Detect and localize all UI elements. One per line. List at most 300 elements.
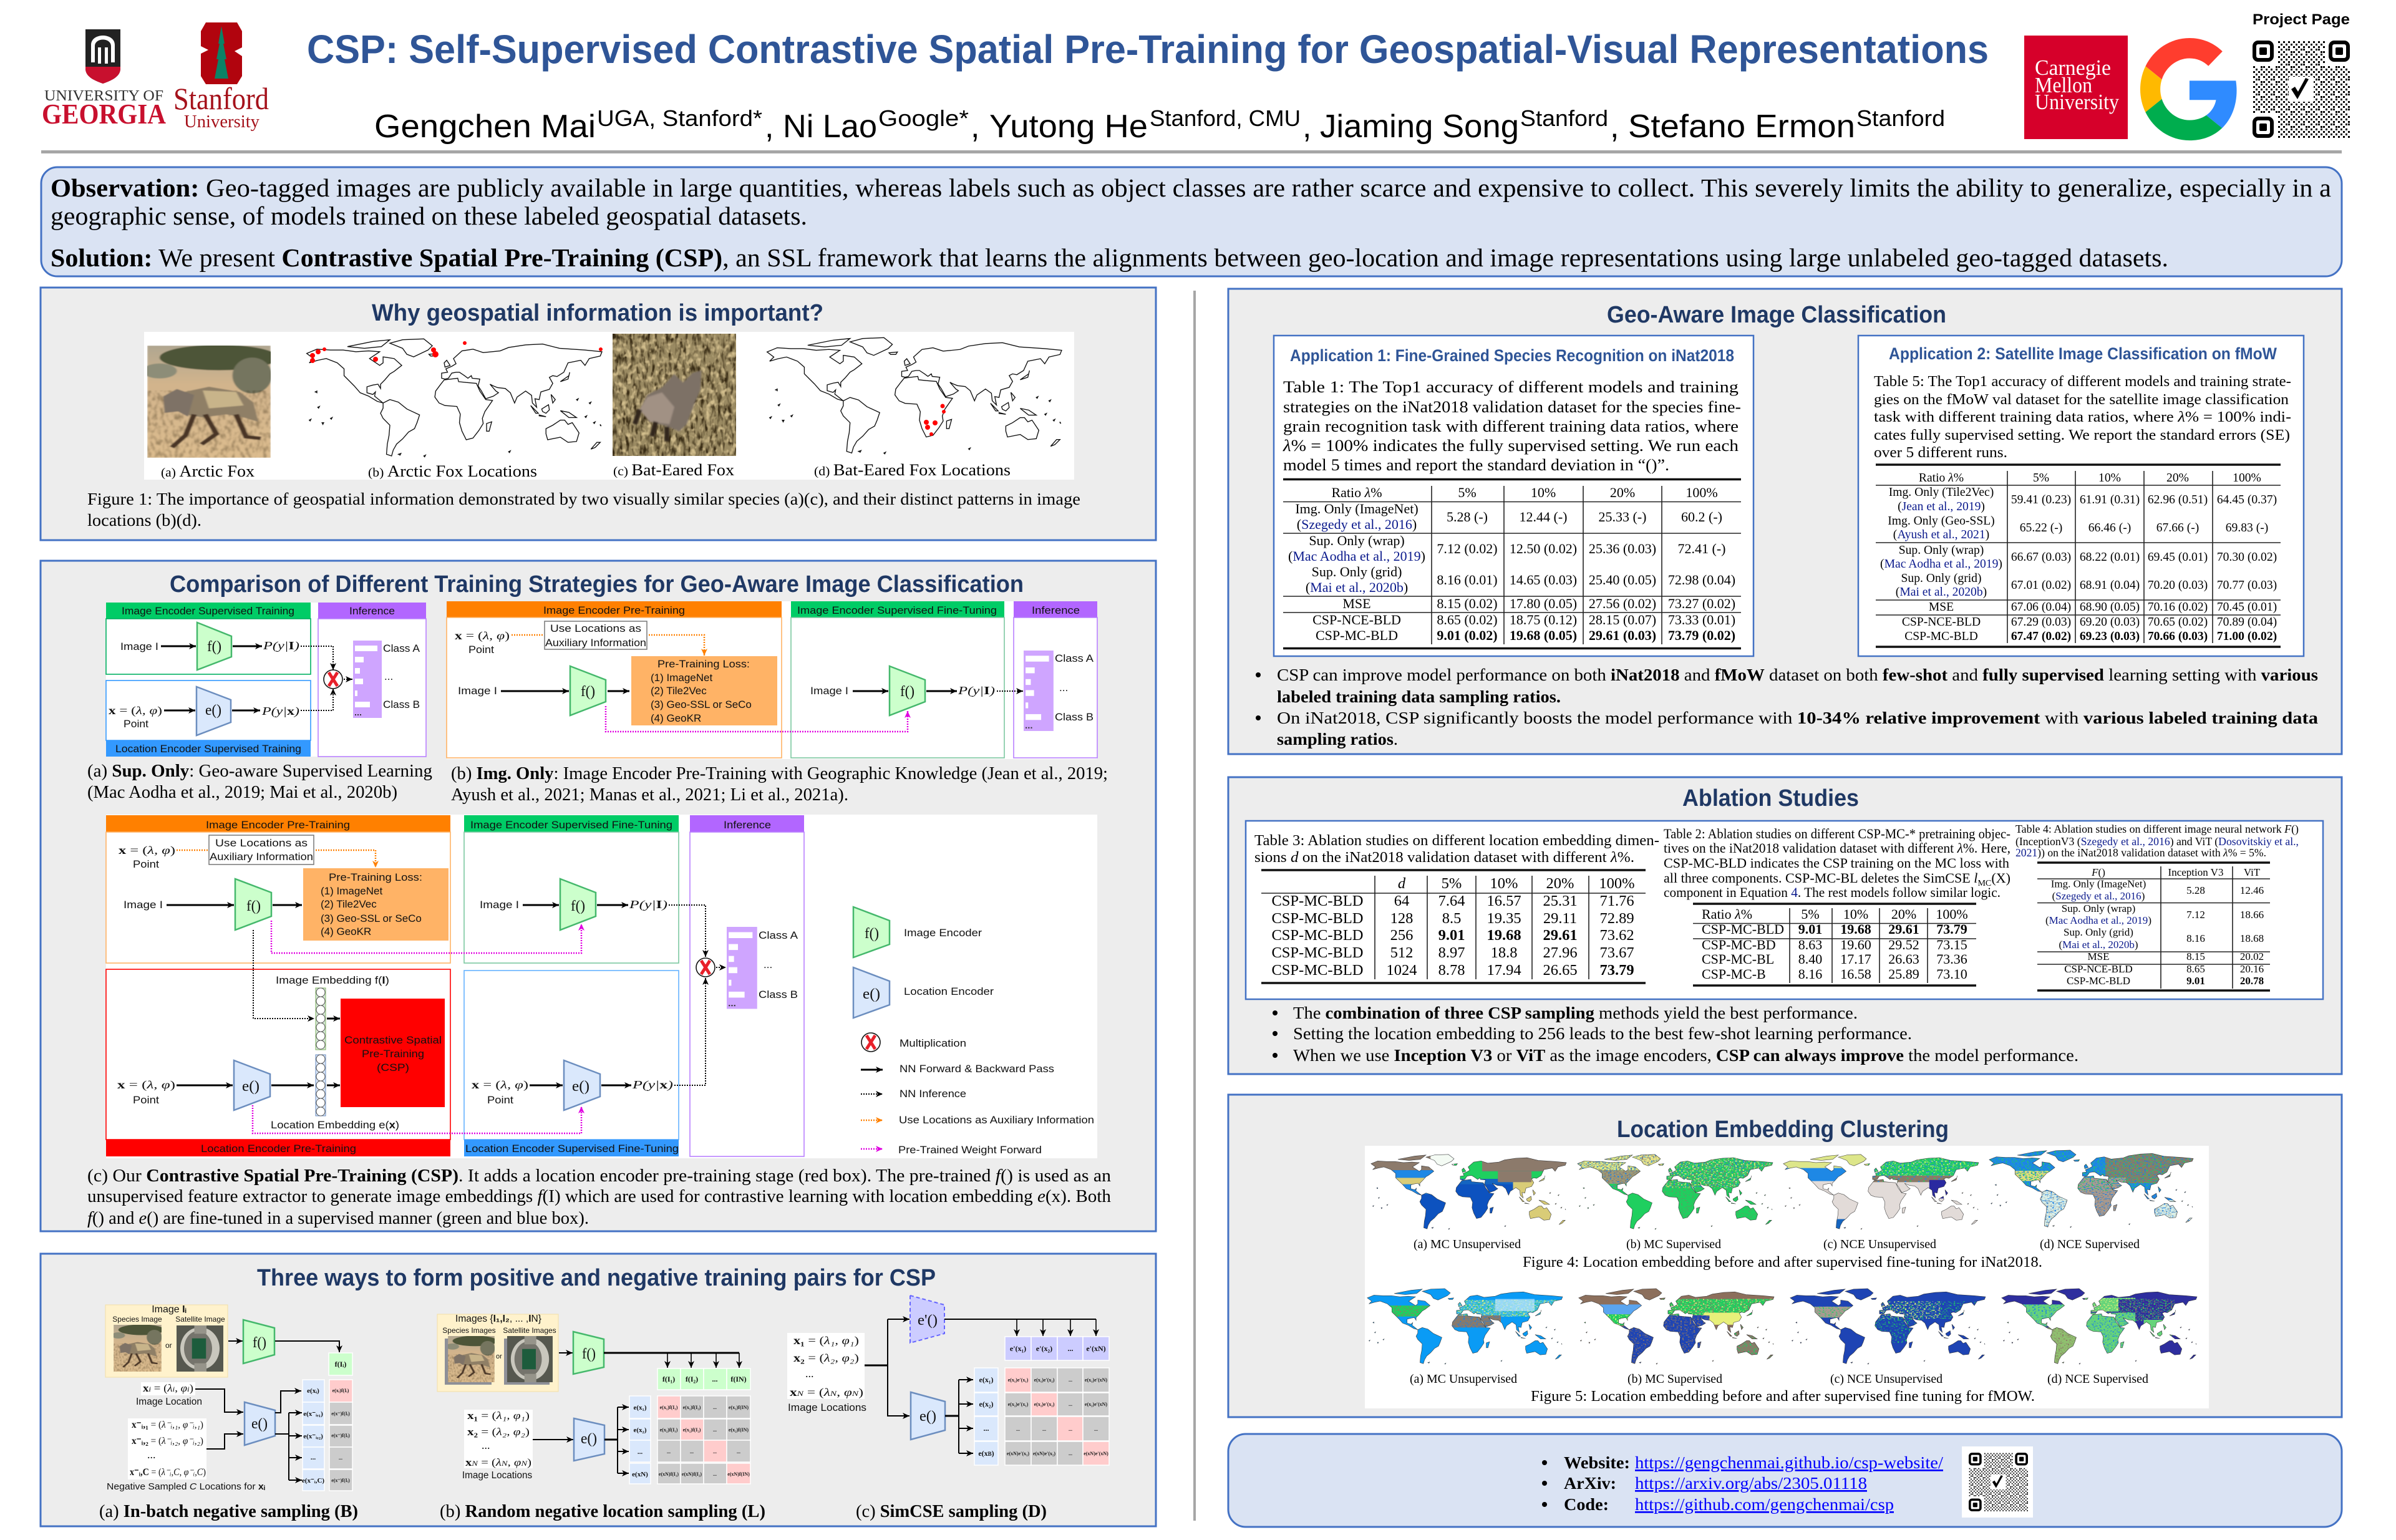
table 2: MC: [1977, 879, 1991, 888]
diagram: (c) contrastive spatial pre-training: Point: [133, 1094, 159, 1106]
caption: (c): unsupervised feature extractor to generate image embeddings f(I) which are used for contrastive learning with location embedding e(x). Both: [87, 1187, 1111, 1206]
logo: Carnegie Mellon University: Carnegie: [2035, 56, 2111, 80]
table 5: 68.22 (0.01): [2080, 551, 2140, 564]
table 3: 17.94: [1487, 962, 1521, 979]
diagram: (b) image only: f(): [900, 684, 914, 700]
panel: why geospatial information is important: [41, 288, 1156, 540]
diagram: (c) contrastive spatial pre-training: Point: [133, 858, 159, 870]
table 4: (): [2098, 866, 2105, 878]
table 1: 18.75 (0.12): [1510, 612, 1577, 627]
ablation bullets: The combination of three CSP sampling methods yield the best performance.: [1293, 1004, 1858, 1022]
table 1: 5.28 (-): [1447, 509, 1488, 525]
icon: project page QR code: [2253, 41, 2350, 138]
table 2: [1664, 826, 2010, 986]
table 3: CSP-MC-BLD: [1271, 927, 1364, 944]
diagram: random negative location sampling: f(I₂): [686, 1375, 698, 1383]
diagram: (a) supervised only: f(): [207, 639, 221, 655]
table 4: Img. Only (ImageNet): [2051, 878, 2146, 889]
map: arctic fox locations: [307, 339, 603, 457]
table 4: 5.28: [2186, 884, 2205, 896]
key findings bullets: labeled training data sampling ratios.: [1277, 687, 1561, 706]
table 3: 16.57: [1487, 893, 1521, 909]
table 4: 7.12: [2186, 909, 2205, 921]
table 1: Img. Only (ImageNet): [1295, 501, 1419, 516]
table 1: (Mac Aodha et al., 2019): [1288, 548, 1425, 564]
diagram: random negative location sampling: e(x₂)f(I₂): [683, 1427, 701, 1433]
table 2: 19.60: [1840, 937, 1871, 952]
diagram: SimCSE sampling: e'(x₁): [1010, 1344, 1026, 1353]
table 3: 26.65: [1543, 962, 1578, 979]
table 2: 100%: [1936, 906, 1968, 922]
table 1: 5%: [1458, 485, 1477, 500]
fig 5 sub-captions: [1410, 1372, 2148, 1386]
key findings bullets: [1256, 666, 2319, 748]
table 4: 18.68: [2240, 932, 2264, 944]
table 4: 20.16: [2240, 963, 2264, 975]
table 1: 100%: [1685, 485, 1718, 500]
table 3: 29.11: [1543, 910, 1577, 927]
diagram: (b) image only: f(): [581, 684, 595, 700]
table 5: 70.65 (0.02): [2148, 616, 2208, 629]
diagram: (c) contrastive spatial pre-training: Pre-Training Loss:: [329, 871, 422, 883]
diagram: (a) supervised only: e(): [205, 702, 221, 719]
table 5: 71.00 (0.02): [2217, 630, 2277, 643]
diagram: in-batch negative sampling: ...: [311, 1454, 316, 1461]
fig 4 sub-captions: (c) NCE Unsupervised: [1823, 1237, 1936, 1251]
diagram: in-batch negative sampling: e(x⁻ᵢ,₁): [303, 1410, 323, 1418]
link list: Website:: [1564, 1453, 1630, 1472]
diagram: (b) image only: Auxiliary Information: [545, 637, 646, 649]
table 5: (Ayush et al., 2021): [1893, 528, 1989, 541]
table 1 caption: model 5 times and report the standard deviation in “()”.: [1283, 456, 1669, 474]
map: bat-eared fox locations: [767, 337, 1062, 454]
map: fig 4b MC supervised: [1576, 1154, 1773, 1230]
table 3: Table 3: Ablation studies on different location embedding dimen-: [1254, 832, 1659, 849]
authors: Yutong He: [989, 109, 1148, 145]
table 3: 8.97: [1438, 944, 1465, 961]
map: fig 4c NCE unsupervised: [1782, 1154, 1979, 1230]
table 5: Sup. Only (grid): [1901, 572, 1981, 585]
diagram: random negative location sampling: f(): [582, 1346, 596, 1362]
table 3: d: [1398, 875, 1406, 892]
diagram: SimCSE sampling: e'(xN): [1086, 1344, 1106, 1353]
authors: Stanford: [1520, 105, 1608, 131]
table 5: Ratio λ%: [1919, 472, 1964, 485]
diagram: in-batch negative sampling: Image Location: [136, 1397, 202, 1407]
diagram: random negative location sampling: e(xN)f(IN): [727, 1471, 750, 1477]
table 1: 73.33 (0.01): [1668, 612, 1735, 627]
legend: Multiplication: [900, 1037, 966, 1049]
diagram: (c) contrastive spatial pre-training: ...: [764, 959, 772, 971]
table 5: 67.01 (0.02): [2011, 579, 2071, 592]
legend: e(): [863, 986, 880, 1002]
caption: (a): (a) Sup. Only: Geo-aware Supervised Learning: [87, 762, 432, 781]
panel: ablation studies: [1228, 777, 2342, 1074]
diagram: SimCSE sampling: e(x₂)e'(x₁): [1008, 1402, 1029, 1407]
table 2: 16.58: [1840, 966, 1871, 982]
table 1: 73.79 (0.02): [1668, 627, 1735, 643]
table 1: 27.56 (0.02): [1589, 596, 1656, 611]
diagram: (c) contrastive spatial pre-training: e(): [572, 1078, 589, 1095]
diagram: (b) image only: P(y| I): [958, 684, 995, 697]
table 5: MSE: [1929, 601, 1954, 614]
table 5: 10%: [2098, 472, 2121, 485]
table 5: 67.66 (-): [2156, 521, 2199, 535]
table 3: 72.89: [1599, 910, 1634, 927]
authors: Ni Lao: [783, 109, 877, 145]
table 1: 60.2 (-): [1681, 509, 1722, 525]
table 3: sions d on the iNat2018 validation dataset with different λ%.: [1254, 849, 1634, 866]
diagram: SimCSE sampling: e(xN)e'(x₁): [1007, 1451, 1029, 1456]
table 3: 8.5: [1442, 910, 1461, 927]
diagram: (a) supervised only: Image I: [120, 641, 158, 652]
diagram: (c) contrastive spatial pre-training: (CSP): [377, 1062, 409, 1073]
table 5: 70.89 (0.04): [2217, 616, 2277, 629]
diagram: (b) image only: x = ( λ, φ ): [455, 629, 510, 642]
table 3: 19.35: [1487, 910, 1521, 927]
diagram: SimCSE sampling: ...: [983, 1424, 989, 1433]
diagram: SimCSE sampling: e(xN)e'(x₂): [1033, 1451, 1055, 1456]
diagram: SimCSE sampling: x₂ = ( λ₂, φ₂ ): [793, 1352, 859, 1365]
table 3: 5%: [1442, 875, 1462, 892]
key findings bullets: sampling ratios .: [1277, 730, 1398, 748]
diagram: random negative location sampling: [437, 1314, 750, 1484]
diagram: (b) image only: Image I: [810, 685, 848, 697]
diagram: (c) contrastive spatial pre-training: e(): [242, 1078, 259, 1095]
table 3: 25.31: [1543, 893, 1578, 909]
diagram: random negative location sampling: Image Locations: [462, 1470, 532, 1481]
table 2: 26.63: [1888, 951, 1919, 967]
table 1: 7.12 (0.02): [1437, 541, 1498, 556]
diagram: random negative location sampling: x₂ = ( λ₂, φ₂ ): [467, 1426, 530, 1438]
table 5: 61.91 (0.31): [2080, 493, 2140, 506]
diagram: SimCSE sampling: e(x₂): [979, 1400, 993, 1408]
diagram: in-batch negative sampling: e(xᵢ): [307, 1387, 319, 1395]
diagram: (b) image only: (1) ImageNet: [651, 672, 712, 684]
logo: Google G: [2140, 38, 2237, 140]
figures container: [1365, 1146, 2209, 1408]
table 2: Table 2: Ablation studies on different CSP-MC-* pretraining objec-: [1664, 826, 2010, 841]
panel: geo-aware image classification: [1228, 289, 2342, 754]
table 2: 8.40: [1798, 951, 1822, 967]
table 2: 25.89: [1888, 966, 1919, 982]
table 5 caption: gies on the fMoW val dataset for the satellite image classification: [1874, 392, 2289, 408]
table 1 caption: strategies on the iNat2018 validation dataset for the species fine-: [1283, 398, 1741, 416]
diagram: (b) image only: Point: [468, 644, 494, 656]
diagram: (b) image only: Pre-Training Loss:: [657, 658, 750, 670]
diagram: in-batch negative sampling: e(x⁻ᵢ,₂): [303, 1433, 323, 1440]
table 2: 73.15: [1936, 937, 1967, 952]
diagram: in-batch negative sampling: ...: [147, 1448, 156, 1461]
diagram: (b) image only: Image I: [458, 685, 497, 697]
table 1: 25.36 (0.03): [1589, 541, 1656, 556]
table 5: (Jean et al., 2019): [1898, 500, 1985, 513]
table 1 caption: Table 1: The Top1 accuracy of different models and training: [1283, 378, 1739, 396]
table 5: CSP-MC-BLD: [1904, 630, 1978, 643]
table 5: Sup. Only (wrap): [1899, 544, 1984, 557]
table 4: 8.15: [2186, 951, 2205, 962]
table 1: (Mai et al., 2020b): [1306, 579, 1408, 595]
table 5: 70.20 (0.03): [2148, 579, 2208, 592]
authors: Gengchen Mai: [374, 109, 596, 145]
table 4: (Mai et al., 2020b): [2059, 939, 2138, 951]
diagram: SimCSE sampling: Image Locations: [788, 1402, 866, 1413]
authors: Jiaming Song: [1320, 109, 1519, 145]
table 3: 19.68: [1487, 927, 1521, 944]
diagram: (c) contrastive spatial pre-training: (3) Geo-SSL or SeCo: [321, 913, 422, 924]
diagram: random negative location sampling: ...: [713, 1427, 717, 1433]
authors: ,: [1610, 109, 1619, 145]
heading: Three ways to form positive and negative training pairs for CSP: [257, 1265, 936, 1291]
map: fig 4a MC unsupervised: [1370, 1154, 1566, 1233]
table 1: 29.61 (0.03): [1589, 627, 1656, 643]
diagram: (b) image only: Image Encoder Supervised Fine-Tuning: [797, 604, 997, 616]
table 3: 10%: [1490, 875, 1518, 892]
diagram: random negative location sampling: ...: [690, 1449, 694, 1455]
table 1: 28.15 (0.07): [1589, 612, 1656, 627]
diagram: random negative location sampling: Images {I₁,I₂, ... ,IN}: [455, 1314, 542, 1324]
table 3: 18.8: [1491, 944, 1517, 961]
table 2: all three components. CSP-MC-BL deletes the SimCSE l: [1664, 870, 1977, 886]
diagram: random negative location sampling: f(IN): [730, 1375, 747, 1383]
diagram: (c) contrastive spatial pre-training: Auxiliary Information: [210, 851, 313, 863]
table 1: 73.27 (0.02): [1668, 596, 1735, 611]
table 2: CSP-MC-B: [1702, 966, 1766, 982]
table 5: 62.96 (0.51): [2148, 493, 2208, 506]
application 2 heading: Application 2: Satellite Image Classification on fMoW: [1889, 344, 2277, 363]
caption: (a): [87, 762, 432, 802]
diagram: SimCSE sampling: ...: [805, 1367, 813, 1380]
table 3: CSP-MC-BLD: [1271, 910, 1364, 927]
diagram: SimCSE sampling: e(x₁)e'(x₁): [1008, 1377, 1029, 1383]
caption: random negative location sampling: (b) Random negative location sampling (L): [440, 1502, 765, 1521]
diagram: (b) image only: (2) Tile2Vec: [651, 685, 707, 697]
key findings bullets: CSP can improve model performance on both iNat2018 and fMoW dataset on both few-shot and fully supervised learning setting with various: [1277, 666, 2318, 684]
table 1: 14.65 (0.03): [1510, 572, 1577, 588]
icon: website QR code: [1962, 1446, 2033, 1518]
table 5: 59.41 (0.23): [2011, 493, 2071, 506]
table 1: Ratio λ%: [1331, 485, 1382, 500]
caption: (c): (c) Our Contrastive Spatial Pre-Training (CSP) . It adds a location encoder pre-training stage (red box). The pre-trained f() is used as an: [87, 1166, 1111, 1186]
table 1: 10%: [1531, 485, 1556, 500]
diagram: (c) contrastive spatial pre-training: Image Encoder Pre-Training: [206, 819, 350, 831]
table 1: 8.15 (0.02): [1437, 596, 1498, 611]
diagram: (a) supervised only: Class B: [383, 699, 420, 710]
diagram: in-batch negative sampling: e(x⁻)f(Iᵢ): [331, 1478, 350, 1483]
table 1: 12.50 (0.02): [1510, 541, 1577, 556]
table 2: 8.16: [1798, 966, 1822, 982]
table 2: (X): [1991, 870, 2010, 886]
table 2: Ratio λ%: [1702, 906, 1752, 922]
table 2: 73.36: [1936, 951, 1967, 967]
sub-captions: (d) Bat-Eared Fox Locations: [814, 461, 1011, 479]
application 1 heading: Application 1: Fine-Grained Species Recognition on iNat2018: [1290, 346, 1734, 365]
diagram: SimCSE sampling: e(xB): [978, 1449, 994, 1458]
diagram: (c) contrastive spatial pre-training: P(y| x): [632, 1078, 673, 1092]
diagram: random negative location sampling: e(x₂)f(I₁): [660, 1427, 678, 1433]
figure 1 caption: Figure 1: The importance of geospatial information demonstrated by two visually similar species (a)(c), and their distinct patterns in image: [87, 490, 1080, 508]
table 4: 20.78: [2240, 975, 2264, 987]
diagram: SimCSE sampling: [787, 1295, 1109, 1465]
diagram: in-batch negative sampling: x⁻ᵢ,C = (λ⁻ᵢ,C, φ⁻ᵢ,C): [130, 1467, 206, 1478]
diagram: (b) image only: Inference: [1032, 604, 1080, 616]
table 3: 20%: [1546, 875, 1574, 892]
table 1: 25.33 (-): [1599, 509, 1646, 525]
caption: (a): (Mac Aodha et al., 2019; Mai et al., 2020b): [87, 783, 397, 802]
table 4: Sup. Only (grid): [2064, 926, 2133, 938]
table 3: 100%: [1599, 875, 1635, 892]
heading: Ablation Studies: [1682, 785, 1859, 811]
legend: f(): [865, 926, 879, 942]
authors: UGA, Stanford*: [597, 105, 762, 131]
table 5 caption: [1874, 374, 2291, 461]
diagram: (c) contrastive spatial pre-training: Pre-Training: [362, 1048, 424, 1060]
table 2: CSP-MC-BD: [1702, 937, 1776, 952]
table 5: 65.22 (-): [2020, 521, 2062, 535]
table 3: 9.01: [1438, 927, 1465, 944]
table 2: 29.52: [1888, 937, 1919, 952]
map: fig 4d NCE supervised: [1988, 1150, 2193, 1231]
diagram: (c) contrastive spatial pre-training: (4) GeoKR: [321, 926, 371, 937]
diagram: (c) contrastive spatial pre-training: Use Locations as: [215, 837, 308, 849]
panel: observation and solution: [41, 167, 2342, 276]
diagram: random negative location sampling: ...: [638, 1448, 643, 1456]
table 3: 8.78: [1438, 962, 1465, 979]
panel: location embedding clustering: [1228, 1095, 2342, 1417]
diagram: random negative location sampling: xN = ( λN, φN): [465, 1456, 531, 1468]
key findings bullets: On iNat2018, CSP significantly boosts the model performance with 10-34% relative improvement with various labeled training data: [1277, 709, 2319, 727]
diagram: (c) contrastive spatial pre-training: Image Encoder Supervised Fine-Tuning: [470, 819, 672, 831]
logo: Carnegie Mellon University: [2024, 36, 2128, 139]
legend: Use Locations as Auxiliary Information: [899, 1114, 1094, 1126]
caption: (b): [451, 764, 1108, 805]
table 5: Img. Only (Tile2Vec): [1889, 486, 1994, 499]
table 2: CSP-MC-BLD indicates the CSP training on the MC loss with: [1664, 855, 2009, 871]
table 5: [1876, 465, 2281, 647]
table 1: 12.44 (-): [1520, 509, 1567, 525]
table 5: 67.47 (0.02): [2011, 630, 2071, 643]
map: fig 5d NCE supervised: [2001, 1288, 2197, 1366]
application 1 box: [1274, 336, 1753, 656]
table 2: 73.79: [1936, 921, 1967, 937]
diagram: random negative location sampling: e(x₂): [633, 1426, 647, 1434]
table 3: CSP-MC-BLD: [1271, 893, 1364, 909]
diagram: (a) supervised only: x = ( λ, φ ): [109, 704, 162, 717]
logo: University of Georgia: UNIVERSITY OF: [44, 88, 163, 104]
table 3: 73.62: [1599, 927, 1634, 944]
panel: three ways to form training pairs: [41, 1254, 1156, 1526]
table 2: 17.17: [1840, 951, 1871, 967]
fig 4 sub-captions: (a) MC Unsupervised: [1414, 1237, 1521, 1251]
table 3: 256: [1390, 927, 1413, 944]
table 3: 1024: [1386, 962, 1417, 979]
diagram: (c) contrastive spatial pre-training: Location Encoder Pre-Training: [201, 1143, 356, 1155]
table 3: 73.79: [1599, 962, 1634, 979]
diagram: (a) supervised only: Class A: [383, 642, 420, 654]
logo: Carnegie Mellon University: University: [2035, 90, 2119, 114]
sub-captions: (a) Arctic Fox: [161, 462, 255, 480]
table 1: [1283, 479, 1741, 649]
diagram: (c) contrastive spatial pre-training: x = ( λ, φ ): [472, 1078, 528, 1092]
image: arctic fox: [142, 345, 278, 458]
table 2: 73.10: [1936, 966, 1967, 982]
panel: observation and solution: Solution: We present Contrastive Spatial Pre-Training (CSP) , an SSL framework that learns the alignments between geo-location and image representations using large unlabeled geo-tagged datasets.: [51, 243, 2168, 272]
table 1: (Szegedy et al., 2016): [1297, 516, 1417, 532]
diagram: SimCSE sampling: ...: [1069, 1402, 1072, 1407]
diagram: (c) contrastive spatial pre-training: x = ( λ, φ ): [119, 844, 175, 857]
panel: comparison of training strategies: [41, 561, 1156, 1231]
table 5: 69.83 (-): [2226, 521, 2268, 535]
diagram: in-batch negative sampling: f(): [253, 1335, 266, 1351]
diagram: (c) contrastive spatial pre-training: f(): [571, 898, 585, 914]
fig 5 caption: Figure 5: Location embedding before and after supervised fine tuning for fMOW.: [1531, 1388, 2035, 1405]
heading: Why geospatial information is important?: [372, 300, 823, 326]
table 5: 69.20 (0.03): [2080, 616, 2140, 629]
diagram: (c) contrastive spatial pre-training: Inference: [724, 819, 771, 831]
authors: Stanford, CMU: [1150, 105, 1301, 131]
authors: [374, 105, 1945, 145]
table 4: CSP-NCE-BLD: [2064, 963, 2133, 975]
legend: Image Encoder: [904, 927, 982, 939]
diagram: (c) contrastive spatial pre-training: x = ( λ, φ ): [117, 1078, 175, 1092]
table 4: MSE: [2088, 951, 2109, 962]
table 3: CSP-MC-BLD: [1271, 944, 1364, 961]
diagram: in-batch negative sampling: e(xᵢ)f(Iᵢ): [332, 1388, 349, 1393]
diagram: SimCSE sampling: e(x₁)e'(x₂): [1034, 1377, 1055, 1383]
link list: https://gengchenmai.github.io/csp-website/: [1635, 1453, 1944, 1472]
table 5 caption: task with different training data ratios, where λ% = 100% indi-: [1874, 409, 2291, 425]
table 4: ViT: [2244, 866, 2261, 878]
table 1: 9.01 (0.02): [1437, 627, 1498, 643]
diagram: random negative location sampling: f(I₁): [662, 1375, 675, 1383]
fig 5 sub-captions: (d) NCE Supervised: [2047, 1372, 2148, 1386]
table 4: 20.02: [2240, 951, 2264, 962]
diagram: SimCSE sampling: ...: [1069, 1377, 1072, 1383]
table 5: 70.77 (0.03): [2217, 579, 2277, 592]
diagram: in-batch negative sampling: e(x⁻)f(Iᵢ): [331, 1411, 350, 1417]
table 3: 128: [1390, 910, 1413, 927]
caption: (c): [87, 1166, 1111, 1228]
diagram: in-batch negative sampling: xi = (λi, φi): [143, 1382, 193, 1394]
ablation bullets: [1273, 1004, 2078, 1065]
legend: Location Encoder: [904, 986, 994, 997]
table 5: 70.45 (0.01): [2217, 601, 2277, 614]
table 5: 5%: [2033, 472, 2049, 485]
table 4: 12.46: [2240, 884, 2264, 896]
table 5: 68.91 (0.04): [2080, 579, 2140, 592]
diagram: (c) contrastive spatial pre-training: Contrastive Spatial: [344, 1034, 442, 1046]
diagram: in-batch negative sampling: or: [165, 1341, 172, 1350]
ablation bullets: When we use Inception V3 or ViT as the image encoders, CSP can always improve the model performance.: [1293, 1046, 2078, 1065]
diagram: SimCSE sampling: ...: [1069, 1426, 1072, 1432]
table 1: 25.40 (0.05): [1589, 572, 1656, 588]
table 5: 70.30 (0.02): [2217, 551, 2277, 564]
table 1: 19.68 (0.05): [1510, 627, 1577, 643]
caption: (c): f() and e() are fine-tuned in a supervised manner (green and blue box).: [87, 1209, 589, 1228]
diagram: (c) contrastive spatial pre-training: (2) Tile2Vec: [321, 898, 377, 910]
ablation bullets: Setting the location embedding to 256 leads to the best few-shot learning performance.: [1293, 1024, 1912, 1043]
figure 1 caption: locations (b)(d).: [87, 511, 201, 530]
diagram: (c) contrastive spatial pre-training: Image I: [124, 899, 163, 911]
panel: observation and solution: geographic sense, of models trained on these labeled geospatial datasets.: [51, 201, 807, 230]
caption: SimCSE sampling: (c) SimCSE sampling (D): [856, 1502, 1047, 1521]
table 2: tives on the iNat2018 validation dataset with different λ%. Here,: [1664, 840, 2010, 856]
diagram: in-batch negative sampling: e(): [251, 1416, 268, 1432]
caption: in-batch negative sampling: (a) In-batch negative sampling (B): [99, 1502, 358, 1521]
table 3: 27.96: [1543, 944, 1578, 961]
diagram: SimCSE sampling: e(x₁)e'(xN): [1085, 1377, 1107, 1383]
diagram: (c) contrastive spatial pre-training: Location Encoder Supervised Fine-Tuning: [465, 1143, 679, 1155]
